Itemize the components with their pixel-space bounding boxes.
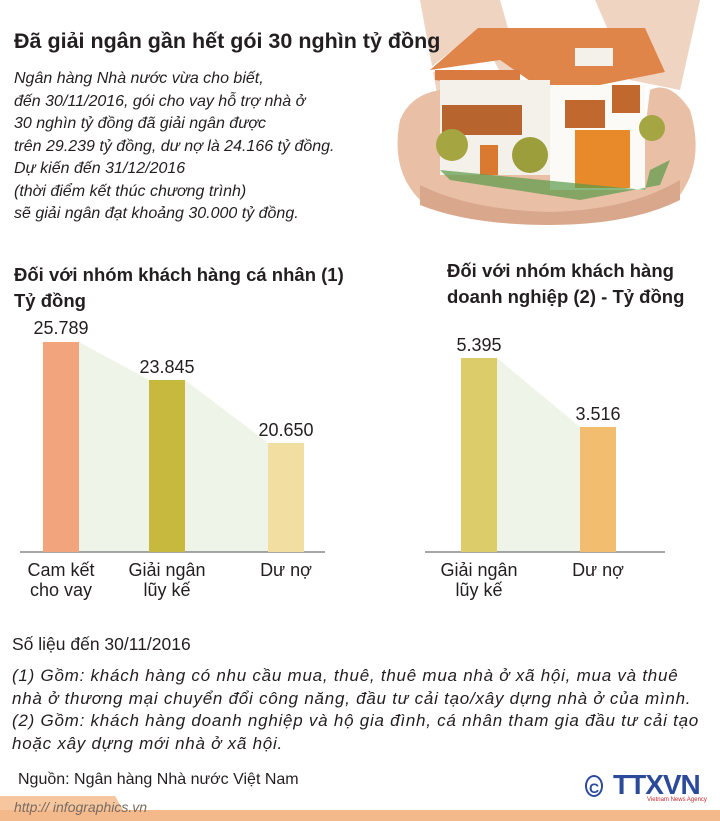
bar: giai ngan: [149, 380, 185, 552]
logo: TTXVN: TTXVN: [613, 769, 700, 800]
logo: TTXVN: Vietnam News Agency: [647, 797, 707, 803]
chart: enterprise: 5.395: [456, 335, 502, 355]
intro text: 30 nghìn tỷ đồng đã giải ngân được: [14, 115, 266, 132]
footnotes: (2) Gồm: khách hàng doanh nghiệp và hộ gia đình, cá nhân tham gia đầu tư cải tạo: [12, 711, 699, 730]
heading: individual customers: [14, 264, 344, 311]
chart: enterprise: 3.516: [575, 404, 621, 424]
intro text: trên 29.239 tỷ đồng, dư nợ là 24.166 tỷ đồng.: [14, 138, 334, 154]
source: Nguồn: Ngân hàng Nhà nước Việt Nam: [18, 771, 299, 788]
chart: individual: lũy kế: [143, 580, 191, 600]
value labels: 25.789: [33, 318, 89, 338]
chart: individual: Giải ngân: [128, 560, 206, 580]
heading: enterprise customers: doanh nghiệp (2) - Tỷ đồng: [447, 286, 684, 307]
heading: enterprise customers: [447, 260, 684, 307]
intro text: Ngân hàng Nhà nước vừa cho biết,: [14, 70, 264, 87]
footnotes: (1) Gồm: khách hàng có nhu cầu mua, thuê, thuê mua nhà ở xã hội, mua và thuê: [12, 666, 678, 685]
chart: individual: [20, 318, 325, 600]
intro text: sẽ giải ngân đạt khoảng 30.000 tỷ đồng.: [14, 205, 299, 222]
footer band: http:// infographics.vn: [14, 799, 147, 815]
chart: individual: 20.650: [258, 420, 314, 440]
heading: individual customers: Tỷ đồng: [14, 290, 86, 311]
bar: giai ngan: [461, 358, 497, 552]
heading: individual customers: Đối với nhóm khách hàng cá nhân (1): [14, 264, 344, 285]
chart: enterprise: lũy kế: [455, 580, 503, 600]
intro text: Dự kiến đến 31/12/2016: [14, 160, 185, 177]
chart: enterprise: Giải ngân: [440, 560, 518, 580]
footnotes: nhà ở thương mại chuyển đổi công năng, đầu tư cải tạo/xây dựng nhà ở của mình.: [12, 688, 691, 708]
footnotes: [12, 666, 699, 752]
bar: du no: [268, 443, 304, 552]
chart: enterprise: Dư nợ: [572, 560, 624, 580]
heading: enterprise customers: Đối với nhóm khách hàng: [447, 260, 674, 281]
chart: individual: 23.845: [139, 357, 195, 377]
logo: TTXVN: [585, 769, 707, 803]
category labels: Cam kết: [27, 560, 95, 580]
bar: du no: [580, 427, 616, 552]
intro text: (thời điểm kết thúc chương trình): [14, 182, 246, 200]
footnotes: hoặc xây dựng mới nhà ở xã hội.: [12, 734, 283, 752]
intro text: đến 30/11/2016, gói cho vay hỗ trợ nhà ở: [14, 92, 305, 110]
logo: TTXVN: C: [589, 780, 599, 796]
footer band: [0, 796, 720, 821]
chart: enterprise: [425, 335, 665, 600]
category labels: cho vay: [30, 580, 92, 600]
data date: Số liệu đến 30/11/2016: [12, 634, 191, 654]
intro text: [14, 70, 334, 222]
chart: individual: Dư nợ: [260, 560, 312, 580]
title: Đã giải ngân gần hết gói 30 nghìn tỷ đồng: [14, 29, 440, 53]
bar: cam ket: [43, 342, 79, 552]
category labels: [27, 560, 95, 600]
illustration: house in hands: [398, 0, 700, 225]
